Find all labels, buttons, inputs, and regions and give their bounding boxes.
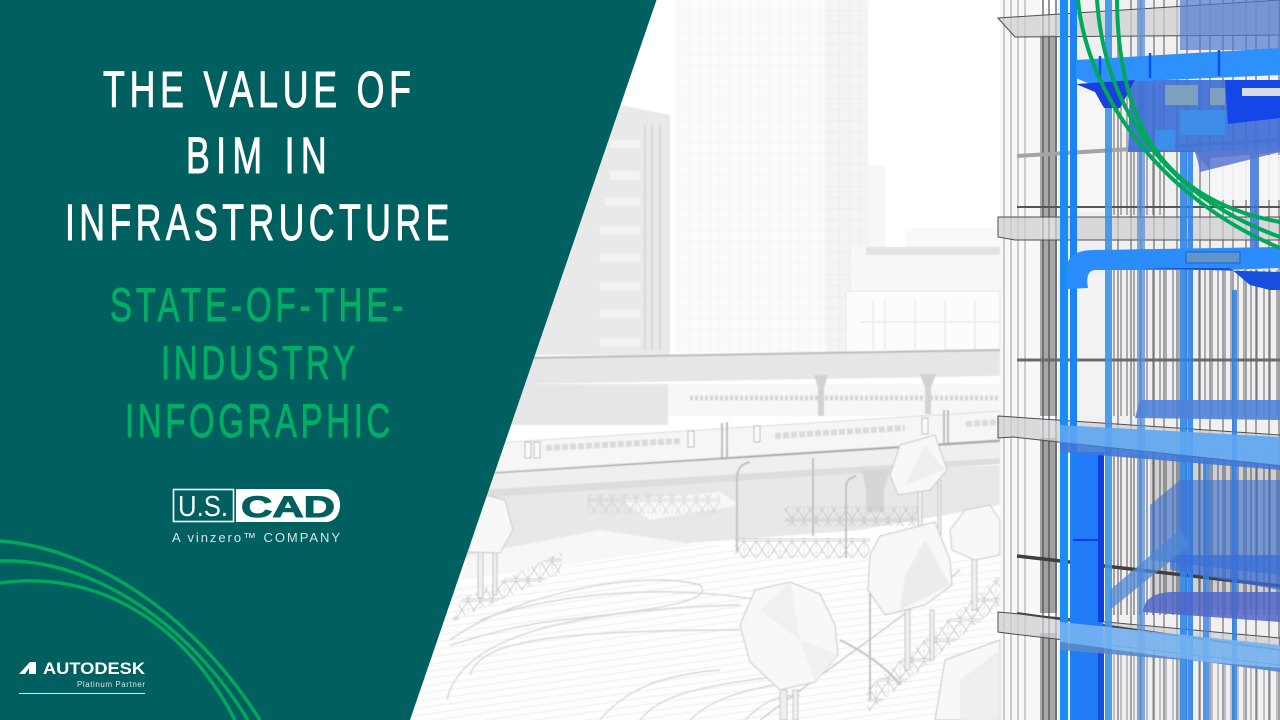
low-poly trees — [468, 435, 1000, 720]
logo: U.S. CAD: U.S. — [178, 491, 228, 523]
blue equipment cluster, lower — [1110, 400, 1280, 622]
logo: U.S. CAD: CAD — [241, 491, 335, 524]
subtitle: INDUSTRY — [161, 336, 355, 389]
train — [495, 410, 1000, 474]
logo: Autodesk Platinum Partner: AUTODESK — [43, 660, 145, 678]
logo: U.S. CAD — [172, 489, 340, 545]
main glass tower — [675, 0, 868, 352]
panel background — [0, 0, 656, 720]
logo: U.S. CAD: A vinzero™ COMPANY — [172, 530, 340, 545]
title: BIM IN — [186, 128, 327, 185]
blue equipment cluster, upper — [1128, 0, 1280, 172]
wireframe facade — [1000, 0, 1280, 720]
green arcs, top right — [1078, 0, 1280, 248]
large vertical shaft — [1073, 452, 1104, 720]
tree trunks — [478, 480, 977, 720]
translucent slab ducts — [1060, 425, 1280, 672]
plaza curves — [447, 570, 960, 720]
lower viaduct with pillar — [475, 442, 1000, 512]
title: INFRASTRUCTURE — [65, 195, 449, 252]
ground plaza — [410, 465, 1000, 720]
slab edge beams — [1017, 140, 1280, 650]
upper viaduct — [497, 350, 1000, 425]
vertical risers — [1060, 0, 1259, 720]
main upper duct — [1076, 48, 1280, 108]
second duct with elbow — [1067, 247, 1280, 290]
illustration: BIM wireframe building with MEP pipes — [998, 0, 1280, 720]
logo: Autodesk Platinum Partner — [19, 660, 145, 694]
title — [65, 62, 449, 252]
railings — [452, 494, 1000, 712]
left mid-rise building — [530, 105, 670, 355]
subtitle: STATE-OF-THE- — [110, 278, 403, 331]
low-rise building — [846, 165, 1000, 353]
subtitle — [110, 278, 403, 447]
logo: Autodesk Platinum Partner: Platinum Partner — [77, 680, 145, 689]
left teal panel — [0, 0, 656, 720]
illustration: city and rail infrastructure — [410, 0, 1000, 720]
subtitle: INFOGRAPHIC — [125, 394, 390, 447]
title: THE VALUE OF — [103, 62, 411, 119]
lamp posts — [737, 458, 905, 700]
green arcs, bottom left — [0, 541, 260, 720]
floor slabs — [998, 0, 1280, 665]
